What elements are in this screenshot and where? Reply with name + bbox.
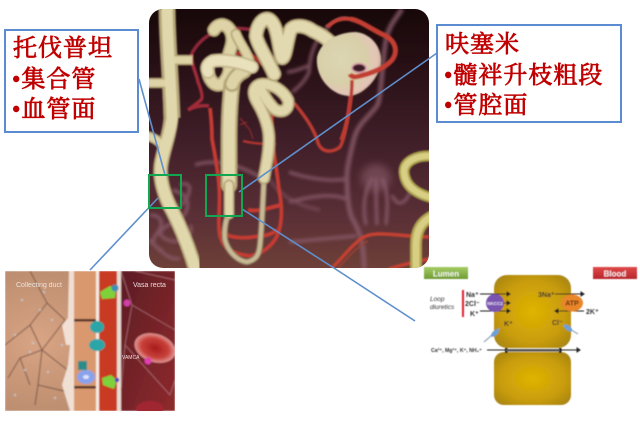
cell boundaries [5, 271, 70, 405]
callout: tolvaptan [4, 29, 139, 133]
green marker: collecting duct [148, 174, 182, 209]
callout: tolvaptan: •集合管 [12, 67, 96, 93]
callout: furosemide: •髓袢升枝粗段 [444, 63, 603, 89]
blood label: Blood [604, 270, 626, 278]
blurred glomerulus [361, 164, 391, 192]
image caption: collecting duct: Collecting duct [16, 282, 62, 289]
callout: tolvaptan: 托伐普坦 [13, 36, 113, 62]
ion arrows [480, 292, 584, 352]
loop diuretic mechanism diagram: diuretics [430, 304, 455, 311]
potassium channel [484, 328, 500, 342]
green marker: thick ascending limb [205, 174, 243, 217]
blood label [593, 267, 637, 279]
NKCC2 transporter: NKCC2 [487, 301, 503, 306]
lower epithelial cell [494, 352, 571, 405]
interstitium [121, 271, 175, 411]
callout: furosemide [436, 24, 622, 123]
loop of Henle [207, 19, 433, 272]
ion labels: K⁺ [504, 321, 513, 328]
transport proteins [100, 286, 116, 299]
image caption: vasa recta: Vasa recta [133, 282, 166, 289]
tubular wall cells [74, 271, 98, 411]
ion labels: K⁺ [470, 311, 479, 318]
lumen label [424, 267, 468, 279]
kidney nephron illustration [149, 9, 429, 268]
loop diuretics label: Loop [430, 296, 445, 303]
loop diuretics bracket [462, 290, 464, 317]
ion labels: 2K⁺ [586, 309, 599, 316]
thin limb [225, 178, 264, 262]
red vessels behind tubules [188, 18, 429, 269]
callout: furosemide: 呋塞米 [445, 32, 520, 58]
image caption: vamca: VAMCA [122, 355, 140, 361]
collecting duct [147, 5, 197, 275]
ion labels: Ca²⁺, Mg²⁺, K⁺, NH₄⁺ [431, 348, 482, 354]
ion labels: 3Na⁺ [538, 292, 555, 299]
faint background vessels [149, 9, 410, 269]
luminal surface [62, 271, 74, 411]
collecting duct micrograph [5, 271, 175, 411]
chloride channel [563, 323, 578, 334]
vessel [98, 271, 120, 411]
loop diuretic mechanism diagram [423, 266, 638, 406]
upper epithelial cell [494, 275, 571, 348]
NKCC2 transporter [486, 294, 504, 312]
renal corpuscle [317, 19, 395, 140]
ion labels: Na⁺ [466, 292, 479, 299]
ATP pump [561, 294, 583, 312]
ion labels [431, 292, 599, 354]
callout: furosemide: •管腔面 [444, 93, 528, 119]
flat top hook [207, 60, 252, 72]
right yellow tubules [404, 156, 433, 198]
top small tube [208, 25, 232, 85]
M shaped convoluted tube [256, 19, 330, 74]
ion labels: 2Cl⁻ [465, 301, 480, 308]
thick limb lower [229, 84, 232, 185]
callout: tolvaptan: •血管面 [12, 97, 96, 123]
lumen label: Lumen [433, 270, 459, 278]
right limb [254, 84, 288, 178]
ion labels: Cl⁻ [552, 320, 563, 327]
particles [14, 291, 63, 399]
ATP pump: ATP [565, 300, 579, 308]
